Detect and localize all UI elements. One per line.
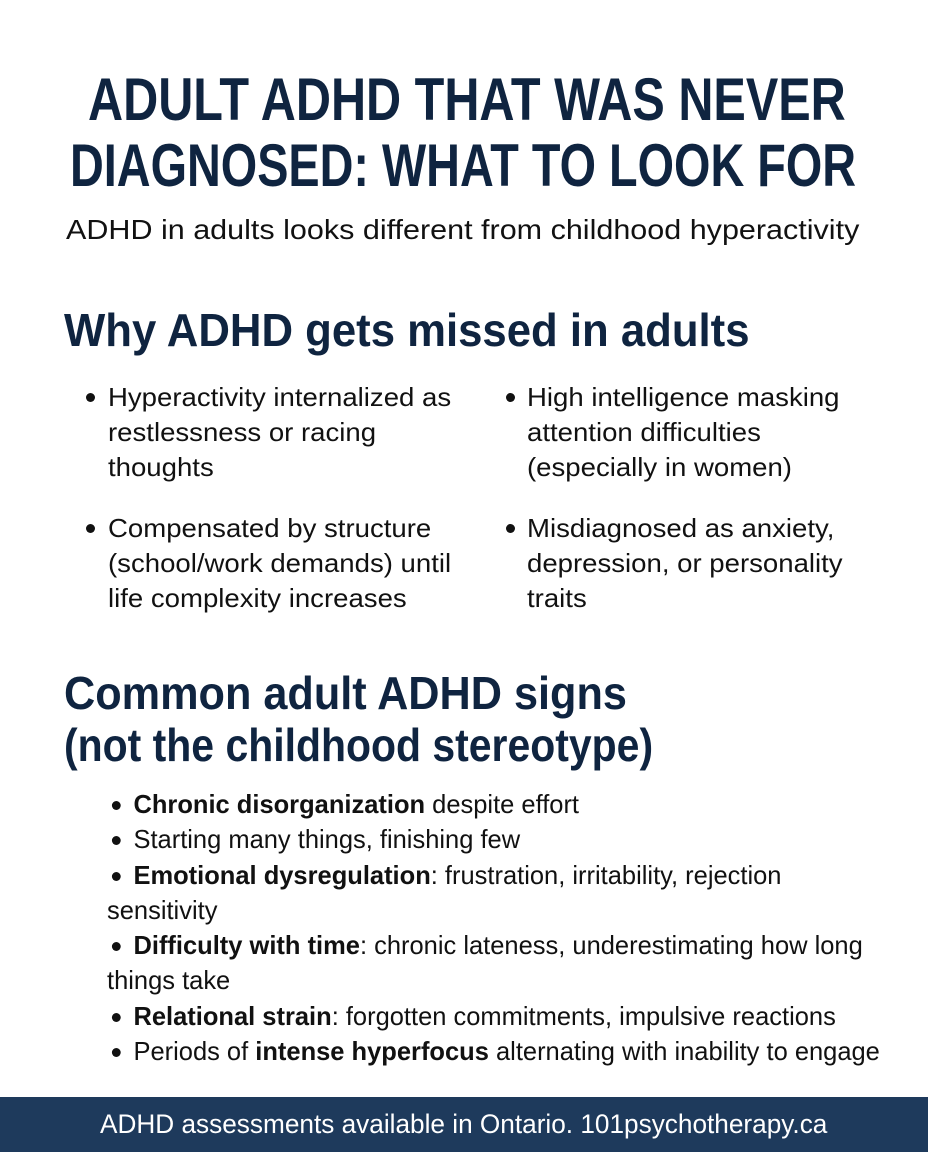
panel: signs list: things take [107,965,230,995]
title [70,66,856,199]
bullet: misdiagnosed: depression, or personality [527,548,843,578]
bullet: compensated [86,513,451,613]
bullet: compensated: Compensated by structure [108,513,431,543]
panel: signs list: Emotional dysregulation: frustration, irritability, rejection [133,860,781,890]
bullet: hyperactivity: restlessness or racing [108,417,376,447]
panel: signs list: Chronic disorganization despite effort [133,789,579,819]
bullet: hyperactivity: thoughts [108,452,214,482]
subtitle: ADHD in adults looks different from childhood hyperactivity [66,214,859,245]
bullet: misdiagnosed: traits [527,583,587,613]
panel: signs list [107,789,880,1066]
panel: signs list: Starting many things, finishing few [133,824,520,854]
bullet: hyperactivity [86,382,451,482]
bullet: compensated: (school/work demands) until [108,548,451,578]
heading: why missed: Why ADHD gets missed in adults [64,304,750,356]
heading: common signs: (not the childhood stereotype) [64,719,653,771]
panel: signs list: Difficulty with time: chronic lateness, underestimating how long [133,930,863,960]
bullet: intelligence: (especially in women) [527,452,792,482]
heading: common signs [64,667,653,771]
bullet: intelligence [506,382,840,482]
panel: signs list: Periods of intense hyperfocus alternating with inability to engage [133,1036,880,1066]
panel: why missed bullets [86,382,843,613]
panel: signs list: Relational strain: forgotten commitments, impulsive reactions [133,1001,836,1031]
bullet: misdiagnosed: Misdiagnosed as anxiety, [527,513,834,543]
bullet: compensated: life complexity increases [108,583,407,613]
heading: common signs: Common adult ADHD signs [64,667,627,719]
bullet: intelligence: attention difficulties [527,417,761,447]
bullet: intelligence: High intelligence masking [527,382,840,412]
title: DIAGNOSED: WHAT TO LOOK FOR [70,132,856,199]
panel: signs list: sensitivity [107,895,217,925]
footer [0,1097,928,1152]
title: ADULT ADHD THAT WAS NEVER [88,66,846,133]
bullet: hyperactivity: Hyperactivity internalized as [108,382,451,412]
footer: ADHD assessments available in Ontario. 101psychotherapy.ca [100,1109,827,1139]
bullet: misdiagnosed [506,513,843,613]
